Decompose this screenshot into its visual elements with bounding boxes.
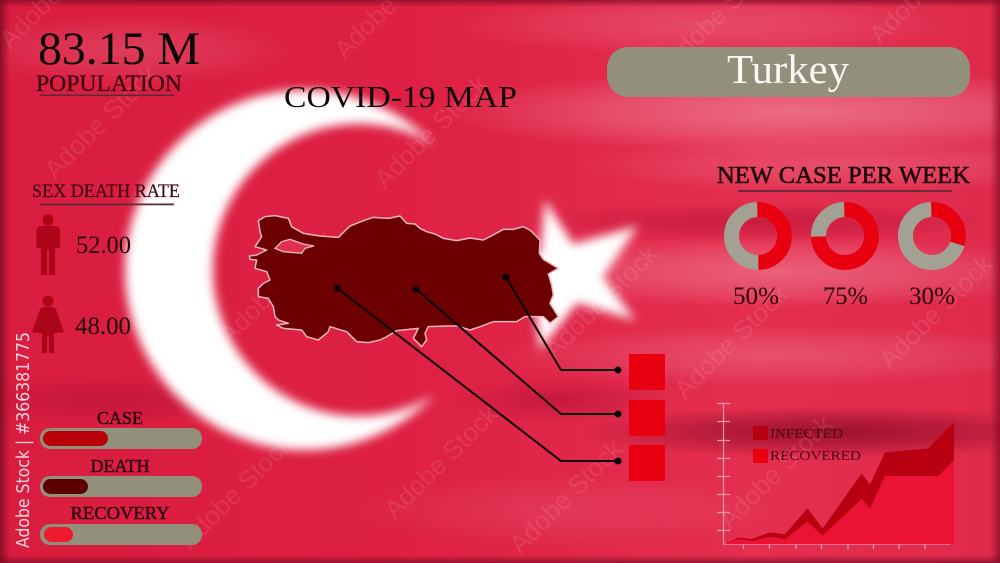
- watermarks: Adobe Stock: [38, 58, 164, 184]
- new case per week heading: NEW CASE PER WEEK: [717, 163, 971, 189]
- progress bars: [40, 408, 202, 545]
- donut 50%: [732, 210, 784, 262]
- male rate value: 52.00: [76, 232, 131, 259]
- callout dots: [334, 274, 622, 464]
- watermarks: Adobe Stock: [538, 238, 664, 364]
- donut percentages: 50%: [733, 283, 779, 310]
- icon: male figure: [36, 214, 60, 275]
- watermarks: Adobe Stock: [213, 223, 339, 349]
- area chart: [717, 403, 954, 549]
- recovered area: [725, 460, 954, 544]
- watermarks: Adobe Stock: [378, 398, 504, 524]
- donut charts: [732, 210, 958, 262]
- sex death rate heading: SEX DEATH RATE: [32, 182, 180, 202]
- watermarks: Adobe Stock: [668, 278, 794, 404]
- population figure: 83.15 M: [38, 23, 200, 75]
- crescent: [116, 82, 436, 458]
- death bar: DEATH: [90, 456, 150, 476]
- sex death rate panel: [32, 182, 180, 353]
- watermarks: Adobe Stock: [713, 408, 839, 534]
- case bar: [40, 408, 202, 449]
- map of Turkey: [249, 216, 558, 347]
- donut 30%: [906, 210, 958, 262]
- callout lines: [337, 277, 618, 461]
- stock id vertical text: Adobe Stock | #366381775: [13, 332, 34, 548]
- star: [488, 200, 638, 350]
- watermarks: Adobe Stock: [173, 428, 299, 554]
- legend: infected: INFECTED: [770, 427, 843, 442]
- icon: female figure: [32, 296, 64, 353]
- donut 75%: [818, 210, 872, 262]
- population label: POPULATION: [36, 71, 182, 96]
- watermarks: Adobe Stock: [873, 248, 999, 374]
- death bar: [40, 456, 202, 497]
- legend: recovered: RECOVERED: [770, 449, 861, 464]
- watermarks: Adobe Stock: [368, 68, 494, 194]
- country name pill: [607, 46, 970, 97]
- infected area: [725, 422, 954, 544]
- recovery bar: [40, 503, 202, 545]
- map title: COVID-19 MAP: [284, 79, 517, 114]
- donut percentages: 30%: [909, 283, 955, 310]
- callout squares: [629, 354, 665, 481]
- case bar: CASE: [97, 408, 143, 428]
- watermarks: Adobe Stock: [163, 98, 289, 224]
- donut percentages: [733, 283, 955, 310]
- recovery bar: RECOVERY: [70, 503, 170, 523]
- donut percentages: 75%: [823, 283, 868, 310]
- country name pill: Turkey: [727, 46, 850, 92]
- watermarks: Adobe Stock: [503, 433, 629, 559]
- female rate value: 48.00: [75, 313, 131, 340]
- chart axes: [717, 403, 950, 549]
